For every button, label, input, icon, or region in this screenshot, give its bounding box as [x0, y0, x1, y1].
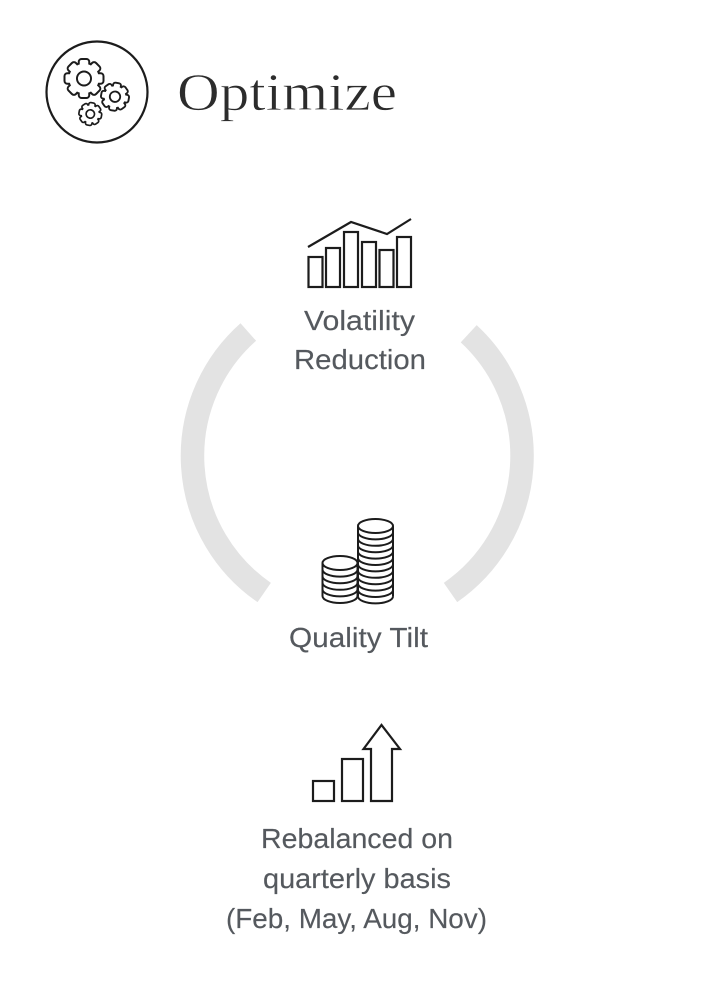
coin stack: tall [358, 519, 393, 603]
label: rebalancing schedule [226, 823, 487, 934]
gear: large [66, 60, 102, 97]
title: Optimize [177, 64, 397, 122]
icon: rising bars with arrow [313, 725, 400, 801]
icon: coin stacks [322, 519, 393, 603]
gear: medium [100, 82, 130, 112]
header icon: gears in circle [46, 42, 148, 142]
label: volatility reduction: Volatility [304, 305, 415, 336]
right arc [450, 334, 522, 592]
label: rebalancing schedule: (Feb, May, Aug, Nov) [226, 903, 487, 934]
icon: bar chart with trend line [308, 219, 411, 287]
label: quality tilt: Quality Tilt [289, 622, 428, 653]
label: volatility reduction [294, 305, 426, 375]
coin stack: short [322, 556, 358, 603]
label: rebalancing schedule: quarterly basis [263, 863, 451, 894]
label: volatility reduction: Reduction [294, 344, 426, 375]
gear: small [78, 102, 102, 126]
left arc [192, 332, 264, 592]
label: rebalancing schedule: Rebalanced on [261, 823, 453, 854]
